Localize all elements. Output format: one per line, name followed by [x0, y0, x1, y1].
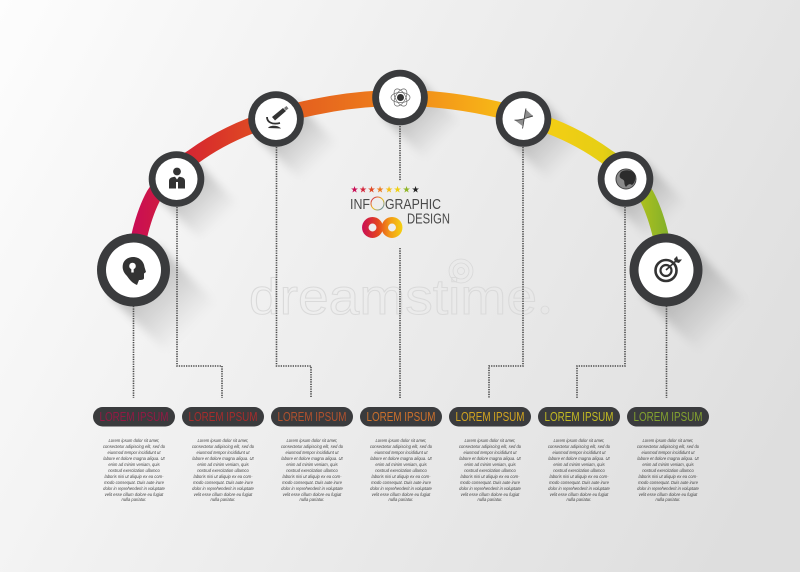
description: eiusmod tempor incididunt ut — [108, 450, 161, 455]
description: laboris nisi ut aliquip ex ea com- — [461, 474, 520, 479]
description: nulla pariatur. — [211, 497, 235, 502]
logo wordmark: INF — [350, 196, 370, 213]
description: enim ad minim veniam, quis — [108, 462, 160, 467]
description: modo consequat. Duis aute irure — [282, 480, 343, 485]
description: dolor in reprehenderit in voluptate — [370, 486, 433, 491]
description: consectetur adipiscing elit, sed do — [548, 444, 611, 449]
icon: head — [123, 257, 146, 285]
description: Lorem ipsum dolor sit amet, — [464, 438, 516, 443]
description: Lorem ipsum dolor sit amet, — [197, 438, 249, 443]
rating stars: ★ — [359, 184, 367, 194]
description: Lorem ipsum dolor sit amet, — [108, 438, 160, 443]
description: nostrud exercitation ullamco — [464, 468, 516, 473]
description: eiusmod tempor incididunt ut — [197, 450, 250, 455]
logo wordmark — [350, 196, 450, 228]
description: dolor in reprehenderit in voluptate — [459, 486, 522, 491]
description: dolor in reprehenderit in voluptate — [103, 486, 166, 491]
description: enim ad minim veniam, quis — [464, 462, 516, 467]
rating stars: ★ — [411, 184, 420, 194]
watermark: dreamstime — [249, 269, 537, 325]
description: laboris nisi ut aliquip ex ea com- — [639, 474, 698, 479]
description: laboris nisi ut aliquip ex ea com- — [283, 474, 342, 479]
node 4: atom — [372, 70, 428, 125]
icon: DNA — [514, 108, 533, 128]
label pill: LOREM IPSUM — [100, 410, 168, 424]
description: velit esse cillum dolore eu fugiat — [372, 492, 431, 497]
column 7 — [627, 407, 709, 502]
rating stars — [350, 184, 420, 194]
icon: person — [169, 168, 185, 188]
description: nulla pariatur. — [656, 497, 680, 502]
description: nulla pariatur. — [122, 497, 146, 502]
description: enim ad minim veniam, quis — [286, 462, 338, 467]
description: labore et dolore magna aliqua. Ut — [370, 456, 432, 461]
column 1 — [93, 407, 175, 502]
description: nostrud exercitation ullamco — [553, 468, 605, 473]
description: labore et dolore magna aliqua. Ut — [637, 456, 699, 461]
description: velit esse cillum dolore eu fugiat — [194, 492, 253, 497]
description — [281, 438, 344, 502]
description: labore et dolore magna aliqua. Ut — [281, 456, 343, 461]
description: modo consequat. Duis aute irure — [371, 480, 432, 485]
description: Lorem ipsum dolor sit amet, — [642, 438, 694, 443]
column 6 — [538, 407, 620, 502]
column 4 — [360, 407, 442, 502]
rating stars: ★ — [350, 184, 359, 194]
description: laboris nisi ut aliquip ex ea com- — [550, 474, 609, 479]
description — [370, 438, 433, 502]
description: modo consequat. Duis aute irure — [549, 480, 610, 485]
rating stars: ★ — [376, 184, 384, 194]
center logo — [350, 184, 450, 235]
description: labore et dolore magna aliqua. Ut — [459, 456, 521, 461]
description: enim ad minim veniam, quis — [375, 462, 427, 467]
description: Lorem ipsum dolor sit amet, — [286, 438, 338, 443]
node 2: person — [149, 151, 204, 207]
rating stars: ★ — [385, 184, 393, 194]
description: nulla pariatur. — [389, 497, 413, 502]
node 5: DNA helix — [496, 91, 551, 147]
label pill: LOREM IPSUM — [188, 410, 258, 424]
description: velit esse cillum dolore eu fugiat — [283, 492, 342, 497]
rating stars: ★ — [393, 184, 402, 194]
description: consectetur adipiscing elit, sed do — [281, 444, 344, 449]
description — [192, 438, 255, 502]
rating stars: ★ — [402, 184, 411, 194]
description: enim ad minim veniam, quis — [642, 462, 694, 467]
description: laboris nisi ut aliquip ex ea com- — [105, 474, 164, 479]
description: nulla pariatur. — [478, 497, 502, 502]
description: eiusmod tempor incididunt ut — [553, 450, 606, 455]
icon: microscope — [267, 106, 288, 128]
label pill: LOREM IPSUM — [278, 410, 346, 424]
label pill: LOREM IPSUM — [634, 410, 702, 424]
logo wordmark: DESIGN — [407, 210, 450, 228]
dotted connector lines — [134, 126, 666, 398]
description: eiusmod tempor incididunt ut — [375, 450, 428, 455]
description: velit esse cillum dolore eu fugiat — [461, 492, 520, 497]
description: nostrud exercitation ullamco — [375, 468, 427, 473]
column 5 — [449, 407, 531, 502]
infinity mark — [365, 220, 399, 235]
label pill: LOREM IPSUM — [366, 410, 436, 424]
description: modo consequat. Duis aute irure — [460, 480, 521, 485]
description: Lorem ipsum dolor sit amet, — [553, 438, 605, 443]
description — [103, 438, 166, 502]
description — [548, 438, 611, 502]
description: enim ad minim veniam, quis — [553, 462, 605, 467]
description: eiusmod tempor incididunt ut — [464, 450, 517, 455]
description: nulla pariatur. — [300, 497, 324, 502]
description: consectetur adipiscing elit, sed do — [370, 444, 433, 449]
description: consectetur adipiscing elit, sed do — [637, 444, 700, 449]
description: dolor in reprehenderit in voluptate — [281, 486, 344, 491]
description: consectetur adipiscing elit, sed do — [103, 444, 166, 449]
description: modo consequat. Duis aute irure — [638, 480, 699, 485]
description: dolor in reprehenderit in voluptate — [637, 486, 700, 491]
description: labore et dolore magna aliqua. Ut — [192, 456, 254, 461]
description: dolor in reprehenderit in voluptate — [548, 486, 611, 491]
node 7: target — [630, 234, 702, 306]
description: nostrud exercitation ullamco — [108, 468, 160, 473]
description: consectetur adipiscing elit, sed do — [192, 444, 255, 449]
description: nostrud exercitation ullamco — [286, 468, 338, 473]
description: velit esse cillum dolore eu fugiat — [105, 492, 164, 497]
icon: globe — [616, 169, 636, 189]
description: nostrud exercitation ullamco — [642, 468, 694, 473]
column 3 — [271, 407, 353, 502]
node 6: globe — [598, 151, 653, 207]
description: labore et dolore magna aliqua. Ut — [103, 456, 165, 461]
node 1: head with lightbulb — [97, 234, 170, 306]
description: velit esse cillum dolore eu fugiat — [550, 492, 609, 497]
node 3: microscope — [248, 91, 304, 147]
description: velit esse cillum dolore eu fugiat — [639, 492, 698, 497]
description: nostrud exercitation ullamco — [197, 468, 249, 473]
description — [637, 438, 700, 502]
logo wordmark: GRAPHIC — [385, 196, 441, 213]
description: labore et dolore magna aliqua. Ut — [548, 456, 610, 461]
description: Lorem ipsum dolor sit amet, — [375, 438, 427, 443]
description — [459, 438, 522, 502]
description: nulla pariatur. — [567, 497, 591, 502]
description: dolor in reprehenderit in voluptate — [192, 486, 255, 491]
logo ring letter — [371, 197, 384, 210]
long shadows — [109, 79, 749, 353]
description: modo consequat. Duis aute irure — [193, 480, 254, 485]
icon: atom — [391, 87, 410, 108]
description: laboris nisi ut aliquip ex ea com- — [372, 474, 431, 479]
description: enim ad minim veniam, quis — [197, 462, 249, 467]
label pill: LOREM IPSUM — [456, 410, 524, 424]
description: eiusmod tempor incididunt ut — [286, 450, 339, 455]
description: modo consequat. Duis aute irure — [104, 480, 165, 485]
gradient arc — [133, 98, 667, 272]
column 2 — [182, 407, 264, 502]
description: eiusmod tempor incididunt ut — [642, 450, 695, 455]
description: laboris nisi ut aliquip ex ea com- — [194, 474, 253, 479]
rating stars: ★ — [367, 184, 376, 194]
icon: target — [656, 256, 682, 281]
description: consectetur adipiscing elit, sed do — [459, 444, 522, 449]
label pill: LOREM IPSUM — [544, 410, 614, 424]
